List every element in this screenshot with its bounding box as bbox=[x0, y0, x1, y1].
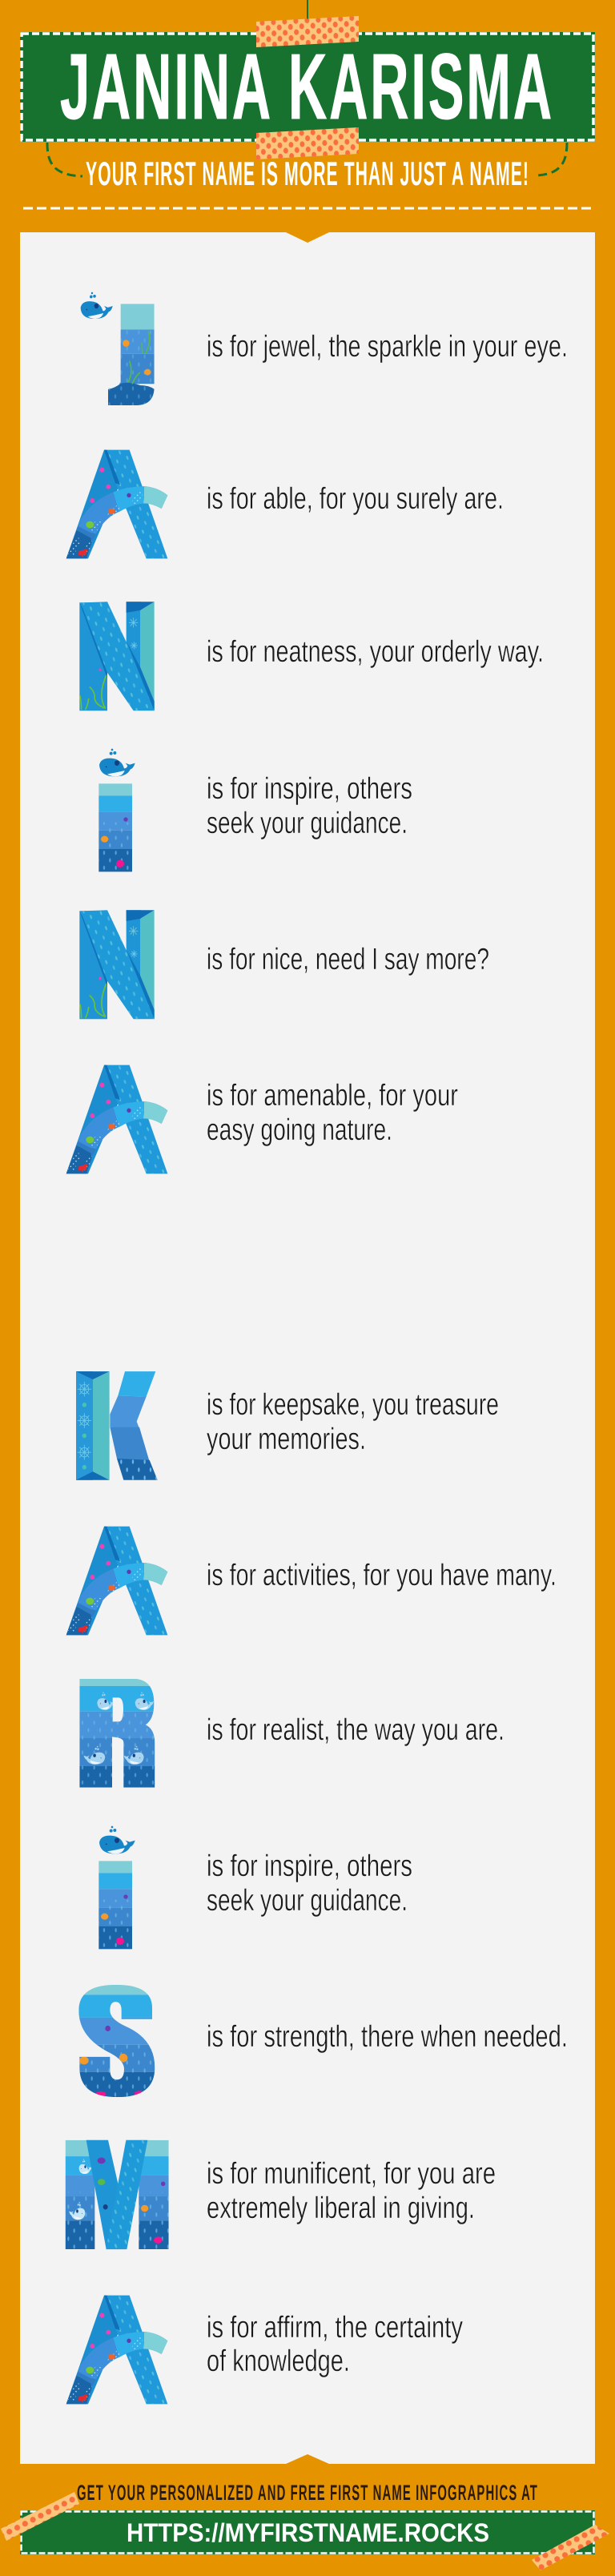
row: K (keepsake) bbox=[76, 1371, 499, 1480]
text: munificent: extremely liberal in giving. bbox=[207, 2192, 475, 2225]
hanging line bbox=[307, 0, 308, 21]
text: inspire bbox=[207, 772, 412, 840]
right dashed bracket bbox=[536, 143, 567, 175]
letter R bbox=[78, 1678, 156, 1789]
letter I with whale bbox=[98, 749, 135, 871]
letter I with whale bbox=[98, 1826, 135, 1949]
text: munificent bbox=[207, 2157, 496, 2225]
text: inspire: seek your guidance. bbox=[207, 807, 408, 840]
footer url: HTTPS://MYFIRSTNAME.ROCKS bbox=[127, 2518, 489, 2547]
text: keepsake bbox=[207, 1388, 499, 1456]
letter M bbox=[64, 2140, 171, 2249]
row: I (inspire) second bbox=[98, 1826, 412, 1949]
text: inspire: seek your guidance. bbox=[207, 1884, 408, 1918]
text: affirm: of knowledge. bbox=[207, 2345, 350, 2378]
left tape bbox=[1, 2492, 79, 2541]
row: R (realist) bbox=[78, 1678, 504, 1789]
text: amenable bbox=[207, 1079, 458, 1147]
text: inspire: is for inspire, others bbox=[207, 1849, 412, 1883]
text: realist: is for realist, the way you are. bbox=[207, 1713, 504, 1747]
text: munificent: is for munificent, for you are bbox=[207, 2157, 496, 2191]
text: affirm: is for affirm, the certainty bbox=[207, 2311, 463, 2345]
text: affirm bbox=[207, 2311, 463, 2378]
top tape bbox=[256, 16, 359, 47]
left dashed bracket bbox=[47, 143, 82, 176]
row: A (affirm) bbox=[64, 2296, 463, 2406]
row: N (nice) bbox=[79, 910, 489, 1019]
letter A bbox=[64, 450, 171, 561]
row: J bbox=[81, 292, 568, 407]
row: N (neatness) bbox=[79, 602, 544, 710]
letter N bbox=[79, 910, 155, 1019]
letter A bbox=[64, 2296, 171, 2406]
green title box bbox=[20, 32, 595, 142]
text: inspire bbox=[207, 1849, 412, 1918]
row: I (inspire) bbox=[98, 749, 412, 871]
text: amenable: is for amenable, for your bbox=[207, 1079, 458, 1113]
text: amenable: easy going nature. bbox=[207, 1113, 392, 1147]
row: A (activities) bbox=[64, 1527, 557, 1637]
row: M (munificent) bbox=[64, 2140, 496, 2249]
icon: whale above J bbox=[81, 292, 113, 319]
right tape bbox=[532, 2525, 609, 2570]
bottom tape bbox=[256, 127, 359, 159]
row: S (strength) bbox=[78, 1983, 568, 2098]
row: A (amenable) bbox=[64, 1065, 458, 1176]
text: nice: is for nice, need I say more? bbox=[207, 943, 489, 976]
footer green box bbox=[20, 2510, 595, 2554]
letter J bbox=[107, 304, 155, 407]
text: keepsake: is for keepsake, you treasure bbox=[207, 1388, 499, 1422]
letter K bbox=[76, 1371, 158, 1480]
row: A (able) bbox=[64, 450, 504, 561]
letter A bbox=[64, 1527, 171, 1637]
text: inspire: is for inspire, others bbox=[207, 772, 412, 806]
letter N bbox=[79, 602, 155, 710]
letter S bbox=[78, 1983, 156, 2098]
footer bbox=[1, 2481, 609, 2570]
letter A bbox=[64, 1065, 171, 1176]
text: keepsake: your memories. bbox=[207, 1423, 366, 1456]
text: able: is for able, for you surely are. bbox=[207, 482, 504, 516]
header banner bbox=[20, 0, 595, 192]
